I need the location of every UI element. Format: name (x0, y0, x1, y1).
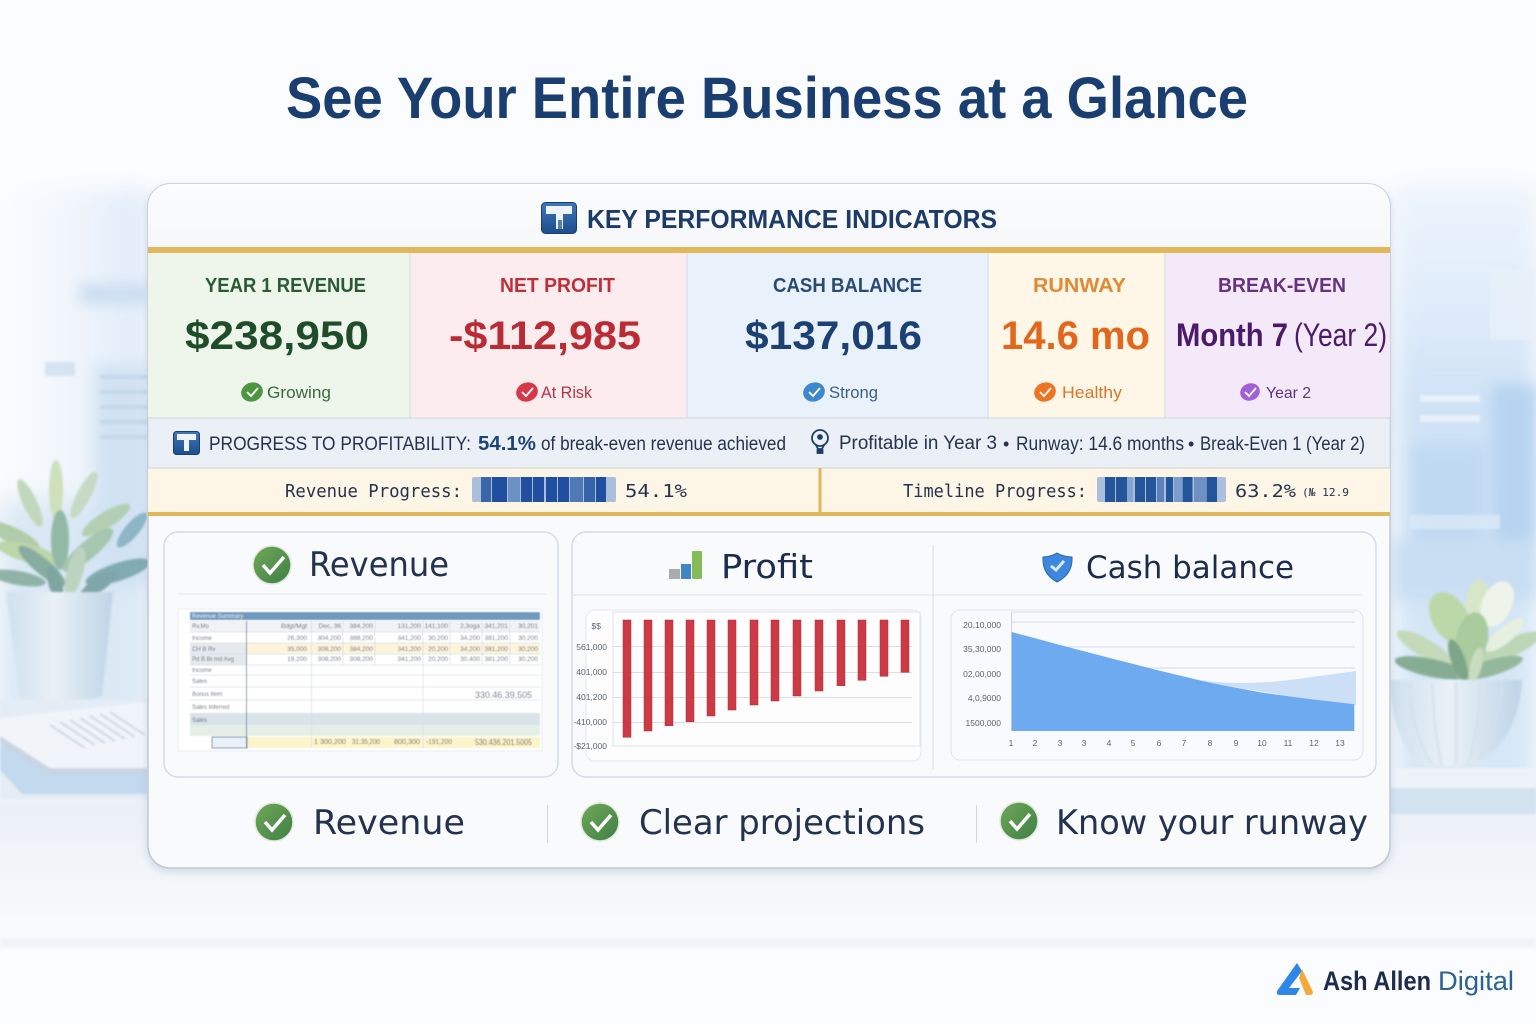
revenue spreadsheet table: 341,201 (484, 623, 508, 630)
cash balance area chart: 3 (1082, 738, 1087, 748)
KPI: runway (988, 253, 1165, 418)
cash balance area chart: 1500,000 (966, 718, 1001, 728)
cash balance area chart (951, 610, 1363, 760)
revenue spreadsheet table: 34,200 (460, 646, 480, 653)
progress to profitability strip: of break-even revenue achieved (541, 434, 786, 455)
main dashboard panel (148, 184, 1390, 868)
revenue spreadsheet table (178, 609, 542, 751)
KPI: cash balance: CASH BALANCE (773, 275, 922, 297)
revenue spreadsheet table: 35,000 (287, 646, 307, 653)
KPI: net profit: -$112,985 (449, 314, 641, 358)
revenue spreadsheet table: Rv,Mo (192, 624, 210, 630)
KPI: break-even: Month 7 (1176, 317, 1288, 353)
cash balance area chart: 13 (1335, 738, 1345, 748)
revenue spreadsheet table: 384,200 (350, 623, 373, 630)
cash balance area chart: 2 (1033, 738, 1038, 748)
revenue spreadsheet table: 131,200 (398, 623, 421, 630)
revenue spreadsheet table: Income (192, 668, 212, 674)
revenue spreadsheet table: 20,200 (428, 656, 448, 663)
profit bar chart: -410,000 (573, 717, 607, 727)
KPI header (148, 184, 1390, 248)
profit bar chart: -$21,000 (573, 741, 607, 751)
KPI: net profit (410, 253, 687, 418)
revenue spreadsheet table: 308,200 (318, 656, 341, 663)
KPI: cash balance: Strong (829, 383, 878, 402)
revenue spreadsheet table: 530.436.201.5005 (475, 738, 532, 747)
revenue spreadsheet table: 30,200 (518, 656, 538, 663)
revenue spreadsheet table: -191,200 (426, 739, 452, 746)
revenue spreadsheet table: 341,200 (398, 646, 421, 653)
revenue spreadsheet table: CH B Rv (192, 647, 215, 653)
revenue spreadsheet table: 26,300 (287, 635, 307, 642)
revenue spreadsheet table: 34,200 (460, 635, 480, 642)
profit bar chart: 401,200 (576, 692, 607, 702)
revenue spreadsheet table: 30,400 (460, 656, 480, 663)
KPI: runway: 14.6 mo (1001, 314, 1150, 358)
revenue spreadsheet table: Pd B Br.md Avg (192, 657, 234, 663)
KPI: net profit: At Risk (541, 383, 592, 402)
profit bar chart (573, 610, 921, 761)
left pot (6, 592, 113, 703)
panel: profit and cash card (572, 532, 1376, 777)
panel: profit and cash card: Cash balance (1086, 550, 1294, 586)
icon: lightbulb (812, 430, 828, 453)
progress to profitability strip: Break-Even 1 (Year 2) (1200, 434, 1365, 455)
cash balance area chart: 1 (1009, 738, 1014, 748)
cash balance area chart: 4,0,9000 (968, 693, 1001, 703)
revenue spreadsheet table: 304,200 (318, 635, 341, 642)
revenue spreadsheet table: Sales (192, 718, 207, 724)
icon: revenue check (253, 546, 291, 584)
revenue spreadsheet table: 308,200 (350, 656, 373, 663)
progress to profitability strip: • (1188, 434, 1194, 454)
profit bar chart: 561,000 (576, 642, 607, 652)
cash balance area chart: 12 (1309, 738, 1319, 748)
cash balance area chart: 20,10,000 (963, 620, 1001, 630)
revenue spreadsheet table: Income (192, 636, 212, 642)
right bowl (1390, 680, 1536, 814)
revenue spreadsheet table: 30,200 (428, 635, 448, 642)
logo: Ash Allen Digital: Ash Allen (1323, 966, 1431, 996)
revenue spreadsheet table: 19,200 (287, 656, 307, 663)
revenue spreadsheet table: 384,200 (350, 646, 373, 653)
cash balance area chart: 4 (1107, 738, 1112, 748)
revenue spreadsheet table: 308,200 (318, 646, 341, 653)
revenue spreadsheet table: 341,200 (398, 656, 421, 663)
right plant (1393, 576, 1536, 685)
revenue spreadsheet table: Sales (192, 679, 207, 685)
revenue progress bar (472, 477, 616, 502)
revenue spreadsheet table: Dec, 36 (319, 623, 341, 630)
cash balance area chart: 3 (1058, 738, 1063, 748)
heading: key performance indicators: KEY PERFORMANCE INDICATORS (587, 204, 997, 234)
progress bars strip: Revenue Progress: (285, 481, 462, 502)
cash balance area chart: 35,30,000 (963, 644, 1001, 654)
icon: small report (174, 432, 200, 454)
revenue spreadsheet table: 388,200 (350, 635, 373, 642)
KPI: break-even: Year 2 (1266, 385, 1311, 402)
revenue spreadsheet table: 381,200 (484, 635, 508, 642)
revenue spreadsheet table: 381,200 (484, 646, 508, 653)
KPI: runway: RUNWAY (1033, 275, 1127, 297)
KPI: cash balance: $137,016 (745, 314, 922, 358)
progress bars strip: 63.2% (1235, 481, 1296, 502)
KPI: cash balance (687, 253, 988, 418)
timeline progress bar (1097, 477, 1226, 502)
cash balance area chart: 8 (1208, 738, 1213, 748)
revenue spreadsheet table: Bonus Item (192, 692, 222, 698)
benefit: revenue: Revenue (313, 803, 465, 843)
progress bars strip: 54.1% (625, 481, 687, 502)
revenue spreadsheet table: 2,3oga (460, 623, 480, 630)
gold rule under KPI header (148, 247, 1390, 253)
KPI: year 1 revenue: $238,950 (185, 314, 369, 358)
cash balance area chart: 6 (1157, 738, 1162, 748)
benefit: clear projections: Clear projections (639, 803, 925, 843)
cash balance area chart: 7 (1182, 738, 1187, 748)
KPI: break-even: (Year 2) (1294, 317, 1387, 353)
icon: cash shield (1043, 553, 1072, 582)
revenue spreadsheet table: Sales Inferred (192, 705, 229, 711)
revenue spreadsheet table: 381,200 (484, 656, 508, 663)
revenue spreadsheet table: 341,200 (398, 635, 421, 642)
cash balance area chart: 11 (1284, 738, 1293, 748)
logo: Ash Allen Digital (1277, 963, 1514, 996)
revenue spreadsheet table: 30,200 (518, 646, 538, 653)
profit bar chart: $$ (592, 621, 601, 631)
KPI: break-even (1165, 253, 1390, 418)
panel: revenue card (164, 532, 558, 777)
progress to profitability strip: Runway: 14.6 months (1016, 434, 1184, 455)
icon: profit bars (669, 551, 702, 579)
cash balance area chart: 5 (1131, 738, 1136, 748)
KPI: year 1 revenue: YEAR 1 REVENUE (205, 275, 366, 297)
icon: logo triangle (1277, 963, 1313, 995)
progress bars strip: (№ 12.9 (1302, 486, 1349, 499)
progress to profitability strip: • (1003, 434, 1009, 454)
left plant (0, 460, 153, 603)
revenue spreadsheet table: 141,100 (424, 623, 448, 630)
progress to profitability strip: 54.1% (478, 433, 536, 455)
KPI: year 1 revenue (148, 253, 410, 418)
revenue spreadsheet table: 31.35,200 (352, 739, 380, 746)
revenue spreadsheet table: 1 300,200 (314, 739, 346, 746)
icon: KPI report (542, 202, 576, 234)
benefit: know your runway: Know your runway (1056, 803, 1368, 843)
progress to profitability strip: PROGRESS TO PROFITABILITY: (209, 434, 471, 455)
cash balance area chart: 10 (1257, 738, 1267, 748)
logo: Ash Allen Digital: Digital (1438, 966, 1514, 996)
revenue spreadsheet table: 800,300 (394, 739, 420, 746)
panel: revenue card: Revenue (309, 545, 449, 585)
KPI: year 1 revenue: Growing (267, 383, 331, 402)
cash balance area chart: 9 (1234, 738, 1239, 748)
revenue spreadsheet table: Revenue Summary (192, 614, 243, 620)
revenue spreadsheet table: Bdgt/Mgt (281, 623, 307, 630)
revenue spreadsheet table: 30,201 (518, 623, 538, 630)
KPI: net profit: NET PROFIT (500, 275, 615, 297)
revenue spreadsheet table: 20,200 (428, 646, 448, 653)
revenue spreadsheet table: 330.46.39.505 (475, 690, 532, 700)
left notebook (0, 700, 148, 800)
progress bars strip (148, 468, 1390, 516)
title: See Your Entire Business at a Glance (286, 66, 1248, 131)
KPI: runway: Healthy (1062, 383, 1123, 402)
revenue spreadsheet table: 30,200 (518, 635, 538, 642)
progress to profitability strip: Profitable in Year 3 (839, 433, 997, 454)
panel: profit and cash card: Profit (721, 547, 813, 586)
progress bars strip: Timeline Progress: (903, 481, 1087, 502)
profit bar chart: 401,000 (576, 667, 607, 677)
KPI: break-even: BREAK-EVEN (1218, 275, 1346, 297)
progress to profitability strip (148, 418, 1390, 468)
cash balance area chart: 02,00,000 (963, 669, 1001, 679)
